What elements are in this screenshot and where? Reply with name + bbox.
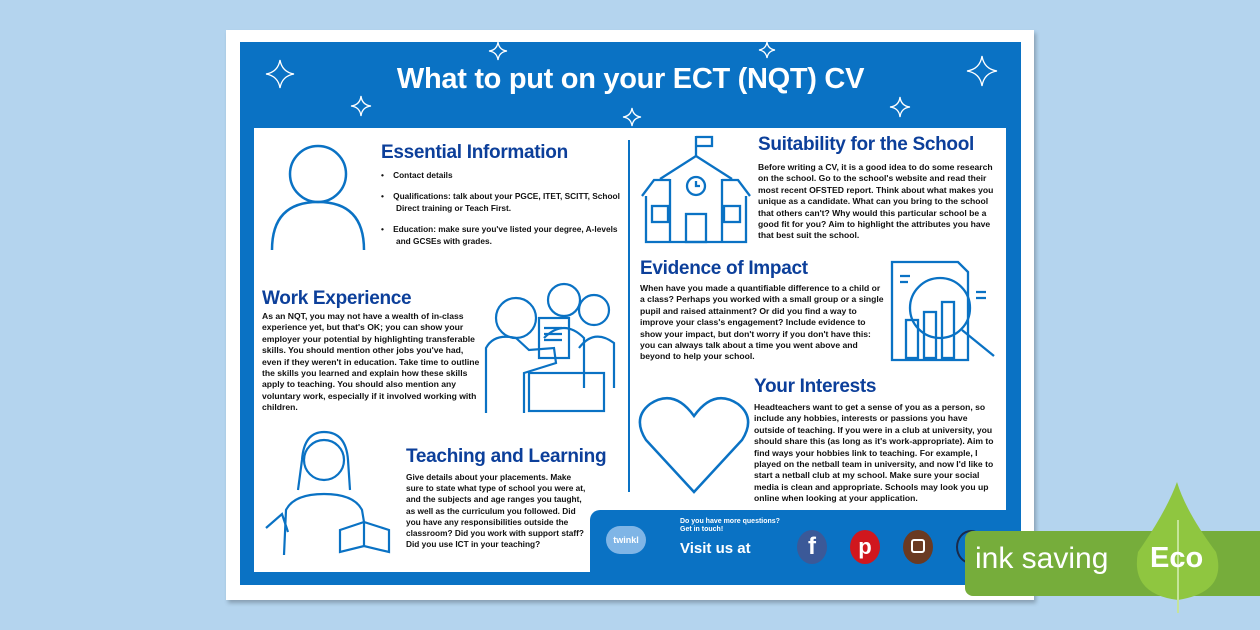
icon: teacher (265, 430, 390, 555)
icon: person (270, 144, 366, 250)
heading: Work Experience (262, 288, 411, 309)
icon: school (641, 136, 751, 244)
icon: facebook (797, 530, 827, 564)
divider (628, 140, 630, 492)
contact text: Get in touch! (680, 526, 723, 533)
footer banner (590, 510, 1021, 585)
icon: pinterest: p (858, 534, 872, 559)
icon: instagram (903, 530, 933, 564)
bullets: • Education: make sure you've listed your degree, A-levels and GCSEs with grades. (381, 224, 618, 246)
title: What to put on your ECT (NQT) CV (397, 63, 864, 95)
icon: facebook: f (808, 533, 816, 560)
contact text: Do you have more questions? (680, 518, 780, 525)
sheet (226, 30, 1034, 600)
heading: Essential Information (381, 142, 568, 163)
stars (266, 42, 998, 126)
twinkl logo: twinkl (613, 535, 639, 545)
heading: Teaching and Learning (406, 446, 606, 467)
contact text (680, 518, 780, 533)
icon: magnifier chart (890, 260, 995, 362)
panel: work experience (262, 282, 616, 413)
panel: your interests (638, 376, 994, 503)
white content panel (254, 128, 1006, 572)
icon: people (484, 282, 616, 413)
twinkl logo (606, 526, 646, 554)
blue frame (240, 42, 1021, 585)
text: As an NQT, you may not have a wealth of in-class experience yet, but that's OK; you can show your employer your potential by highlighting transferable skills. You should mention other jobs you've had, even if they weren't in education. Take time to outline the skills you learned and explain how these skills apply to teaching. You should also mention any voluntary work, especially if it involved working with children. (262, 311, 479, 412)
icon: heart (638, 396, 750, 494)
heading: Suitability for the School (758, 134, 974, 155)
label: ink saving (975, 542, 1108, 575)
bullets: • Qualifications: talk about your PGCE, ITET, SCITT, School Direct training or Teach First. (381, 191, 620, 213)
eco badge: Eco (1150, 542, 1203, 574)
green bar (965, 531, 1260, 596)
text: Give details about your placements. Make sure to state what type of school you were at, and the subjects and age ranges you taught, as well as the curriculum you followed. Did you have any responsibilities outside the classroom? Did you work with support staff? Did you use ICT in your teaching? (406, 472, 585, 549)
icon: pinterest (850, 530, 880, 564)
heading: Your Interests (754, 376, 876, 397)
text: Before writing a CV, it is a good idea to do some research on the school. Go to the school's website and read their most recent OFSTED report. Think about what makes you unique as a candidate. What can you bring to the school that others can't? Why would this particular school be a good fit for you? Aim to highlight the attributes you have that best suit the school. (758, 162, 993, 240)
eco badge (965, 482, 1260, 613)
panel: essential information (270, 142, 620, 250)
icon: partially hidden (956, 530, 986, 564)
text: When have you made a quantifiable difference to a child or a class? Perhaps you worked with a small group or a single pupil and raised attainment? Or did you find a way to improve your class's engagement? Include evidence to show your impact, but don't worry if you don't have this: you can always talk about a time you went above and beyond to help your school. (640, 283, 884, 361)
panel: suitability (641, 134, 993, 244)
visit us: Visit us at (680, 540, 751, 557)
leaf (1137, 482, 1218, 613)
bullets: • Contact details (381, 170, 453, 180)
heading: Evidence of Impact (640, 258, 808, 279)
panel: evidence of impact (640, 258, 995, 362)
bullets (381, 170, 620, 246)
panel: teaching and learning (265, 430, 606, 555)
text: Headteachers want to get a sense of you as a person, so include any hobbies, interests or passions you have outside of teaching. If you were in a club at university, you should share this (as long as it's work-appropriate). Aim to find ways your hobbies link to teaching. For example, I played on the netball team in university, and now I'd like to start a netball club at my school. Make sure your social media is clean and appropriate. Schools may look you up online when looking at your application. (754, 402, 994, 503)
